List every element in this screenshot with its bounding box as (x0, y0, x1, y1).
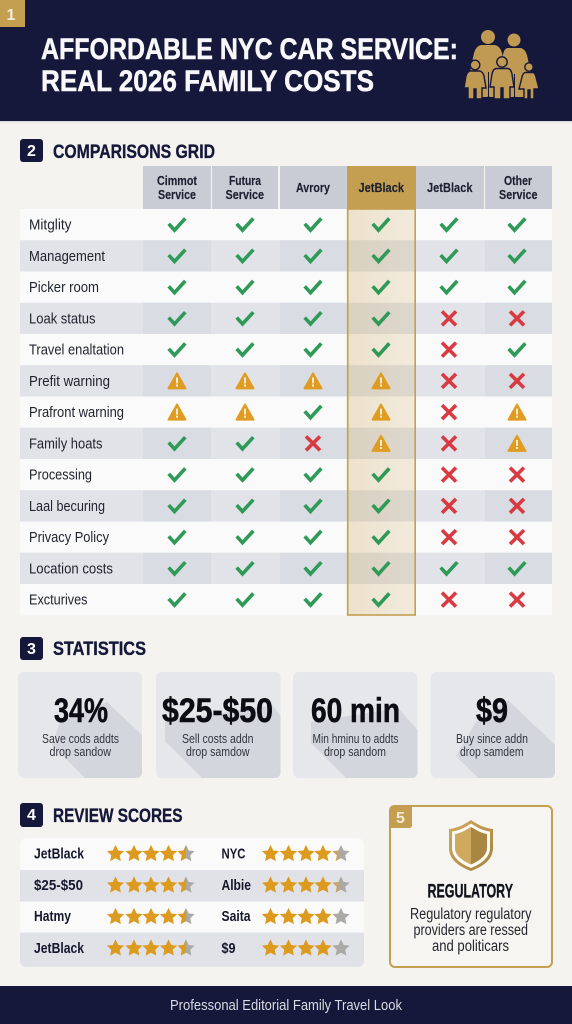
row: Prefit warning (20, 365, 552, 396)
footer (0, 986, 572, 1024)
row: Location costs: Location costs (29, 560, 113, 577)
panel: regulatory (389, 805, 552, 967)
stat card: 60 min (293, 672, 418, 778)
table column headers: Service (499, 187, 538, 202)
row: Prafront warning: Prafront warning (29, 404, 124, 421)
row: Laal becuring (20, 490, 552, 522)
stat card: $9 (430, 672, 555, 778)
stat card: $25-$50: drop samdow (186, 744, 250, 759)
section heading: statistics: STATISTICS (53, 639, 146, 660)
row: Prefit warning: Prefit warning (29, 373, 110, 390)
row: Privacy Policy (20, 522, 552, 553)
section heading: comparisons grid: COMPARISONS GRID (53, 142, 215, 163)
icon: shield (449, 820, 493, 871)
table column headers: Futura (229, 173, 262, 188)
stat card: $25-$50 (156, 672, 280, 778)
row: Mitglity: Mitglity (29, 216, 72, 234)
title (41, 33, 458, 98)
icon: family (464, 30, 539, 99)
row: Travel enaltation (20, 334, 552, 365)
section heading: comparisons grid (20, 139, 215, 163)
section heading: review scores: REVIEW SCORES (53, 806, 182, 827)
stat card: $9: $9 (476, 692, 508, 730)
review row 1 (34, 845, 350, 862)
section badge 1: 1 (7, 7, 16, 24)
review row 3 (34, 908, 350, 925)
stat card: 34%: 34% (54, 692, 108, 730)
stat card: $9: Buy since addn (456, 731, 528, 746)
stat card: $9: drop samdem (460, 744, 524, 759)
review row 1: NYC (222, 846, 246, 862)
review row 1: JetBlack (34, 846, 85, 862)
table column headers: Cimmot (157, 173, 198, 188)
section heading: statistics (20, 637, 146, 660)
table column headers: JetBlack (427, 180, 473, 195)
regulatory text (410, 906, 532, 955)
table column headers: Service (226, 187, 264, 202)
row: Processing: Processing (29, 466, 92, 484)
row: Management: Management (29, 248, 106, 265)
row: Location costs (20, 553, 552, 584)
stat card: 60 min: drop sandom (324, 744, 386, 759)
title: AFFORDABLE NYC CAR SERVICE: (41, 33, 458, 66)
row: Privacy Policy: Privacy Policy (29, 529, 109, 546)
stat card: $25-$50: $25-$50 (162, 692, 273, 730)
highlighted JetBlack column (348, 209, 415, 615)
row: Mitglity (20, 209, 552, 240)
regulatory text: and politicars (432, 938, 509, 955)
section badge 5 (389, 805, 412, 828)
stat card: 60 min: Min hminu to addts (312, 731, 399, 746)
section badge 1 (0, 0, 25, 27)
row: Processing (20, 459, 552, 490)
stat card: 34%: drop sandow (50, 744, 111, 759)
table column headers: Other (504, 173, 532, 188)
section heading: review scores (20, 803, 182, 827)
row: Picker room (20, 272, 552, 303)
footer: Professonal Editorial Family Travel Look (170, 997, 402, 1014)
stat card: 34% (18, 672, 142, 778)
panel: review scores (20, 838, 364, 967)
review row 4: $9 (222, 940, 236, 957)
title: REAL 2026 FAMILY COSTS (41, 65, 374, 98)
row: Excturives: Excturives (29, 592, 88, 608)
section heading: review scores: 4 (27, 807, 36, 824)
table column headers: Avrory (296, 180, 331, 195)
section heading: comparisons grid: 2 (27, 143, 36, 160)
review row 2: Albie (222, 877, 251, 894)
row: Loak status: Loak status (29, 310, 96, 327)
row: Family hoats: Family hoats (29, 435, 102, 452)
comparison table (20, 166, 552, 616)
section badge 5: 5 (396, 810, 405, 827)
row: Family hoats (20, 428, 552, 459)
row: Excturives (20, 584, 552, 616)
stat card: $25-$50: Sell costs addn (182, 731, 254, 746)
table column headers (143, 166, 552, 209)
review row 3: Saita (222, 908, 251, 925)
review row 4 (34, 939, 350, 957)
regulatory text: providers are ressed (414, 922, 528, 939)
stat card: 34%: Save cods addts (42, 731, 119, 746)
header banner (0, 0, 572, 122)
row: Picker room: Picker room (29, 279, 99, 296)
regulatory text: Regulatory regulatory (410, 906, 532, 923)
row: Travel enaltation: Travel enaltation (29, 342, 124, 358)
review row 2: $25-$50 (34, 877, 83, 894)
table column headers: Service (158, 187, 196, 202)
section heading: statistics: 3 (27, 641, 36, 658)
review row 2 (34, 876, 350, 894)
regulatory heading: REGULATORY (428, 882, 513, 902)
row: Loak status (20, 303, 552, 334)
row: Prafront warning (20, 396, 552, 428)
review row 4: JetBlack (34, 940, 85, 957)
row: Management (20, 240, 552, 272)
stat card: 60 min: 60 min (311, 692, 400, 730)
row: Laal becuring: Laal becuring (29, 498, 105, 515)
table column headers: JetBlack (358, 180, 405, 195)
review row 3: Hatmy (34, 908, 72, 925)
